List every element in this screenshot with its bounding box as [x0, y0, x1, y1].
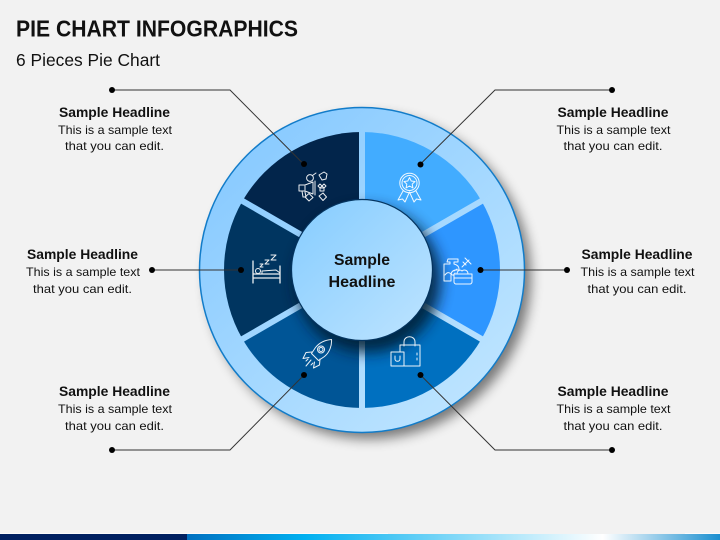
hub text: Sample: [334, 252, 390, 269]
icon: rocket: [303, 340, 332, 368]
outer ring shadow: [207, 115, 531, 439]
text block: bottom right: [556, 383, 671, 433]
pie chart: [200, 108, 531, 439]
icon: bed with zzz: [253, 255, 280, 283]
hub circle: [292, 200, 432, 340]
text block: bottom right: This is a sample text: [556, 402, 671, 416]
subtitle: 6 Pieces Pie Chart: [16, 50, 160, 70]
hub text: Headline: [328, 274, 396, 291]
segment: left: [224, 201, 362, 339]
text block: bottom right: Sample Headline: [558, 383, 669, 399]
segment: bottom right: [362, 270, 482, 408]
text block: middle right: Sample Headline: [582, 246, 693, 262]
text block: bottom left: that you can edit.: [65, 419, 164, 433]
text block: top left: that you can edit.: [65, 139, 164, 153]
text block: top right: This is a sample text: [556, 123, 671, 137]
connector: bottom right: [418, 372, 615, 453]
text block: top left: Sample Headline: [59, 104, 170, 120]
segment: bottom left: [242, 270, 362, 408]
icon: medal: [398, 173, 421, 202]
footer bar: [0, 533, 720, 540]
text block: middle right: This is a sample text: [580, 265, 695, 279]
connector: top right: [418, 87, 615, 168]
outer ring: [200, 108, 524, 432]
text block: top left: [58, 104, 173, 153]
icon: megaphone: [299, 172, 327, 201]
text block: middle right: [580, 246, 695, 296]
connector: bottom left: [109, 372, 307, 453]
text block: top right: [556, 104, 671, 153]
text block: top right: that you can edit.: [564, 139, 662, 153]
text block: top left: This is a sample text: [58, 123, 173, 137]
text block: middle right: that you can edit.: [588, 282, 686, 296]
text block: middle left: [26, 246, 141, 296]
connector: right: [478, 267, 570, 273]
title: PIE CHART INFOGRAPHICS: [16, 16, 298, 42]
icon: shopping bags: [391, 337, 420, 366]
text block: middle left: Sample Headline: [27, 246, 138, 262]
hub shadow: [295, 207, 441, 353]
connector: top left: [109, 87, 307, 167]
connector: left: [149, 267, 244, 273]
text block: top right: Sample Headline: [558, 104, 669, 120]
text block: middle left: This is a sample text: [26, 265, 141, 279]
text block: bottom left: [58, 383, 173, 433]
segment gaps: [236, 125, 488, 415]
segment: top right: [362, 132, 482, 270]
text block: middle left: that you can edit.: [33, 282, 132, 296]
hub text: [328, 252, 396, 291]
text block: bottom left: This is a sample text: [58, 402, 173, 416]
text block: bottom left: Sample Headline: [59, 383, 170, 399]
segment: top left: [242, 132, 362, 270]
icon: spray bottle and cards: [444, 258, 472, 284]
segment: right: [362, 201, 500, 339]
text block: bottom right: that you can edit.: [564, 419, 662, 433]
